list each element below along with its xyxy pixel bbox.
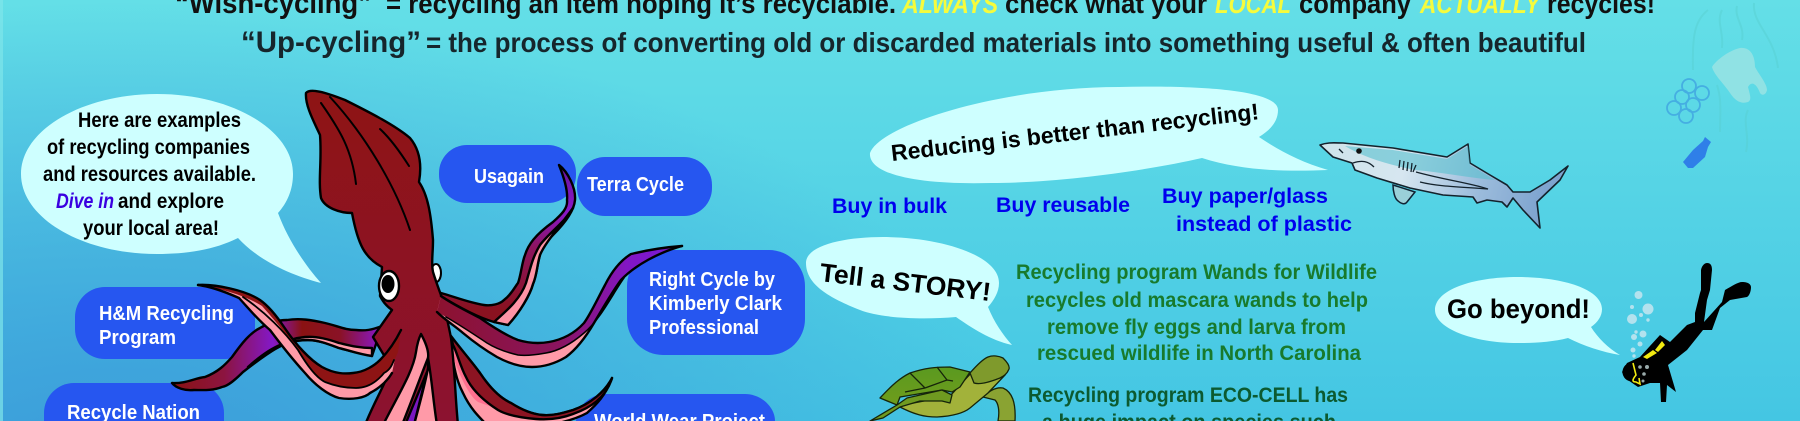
pill: Terra Cycle: Terra Cycle: [587, 173, 684, 196]
heading: up-cycling definition: “Up-cycling”: [241, 26, 421, 59]
text: Wands for Wildlife: [1016, 260, 1377, 365]
illustration: shark: [1320, 143, 1568, 228]
speech bubble: examples of recycling companies: and resources available.: [43, 162, 256, 186]
squid near eye: [379, 271, 399, 301]
pill: H&M Recycling Program: [75, 287, 255, 359]
text: reduce tips: Buy in bulk: [832, 194, 947, 218]
illustration: red squid: [172, 91, 682, 421]
speech bubble: examples of recycling companies: your local area!: [83, 216, 219, 240]
text: reduce tips: Buy paper/glass: [1162, 184, 1328, 208]
speech bubble: go beyond: Go beyond!: [1447, 294, 1590, 324]
icon: ocean trash and seaweed: [1667, 3, 1778, 168]
squid arm: lower left: [172, 319, 382, 390]
squid markings: [321, 97, 410, 230]
text: ECO-CELL: [1028, 383, 1348, 421]
speech bubble: reducing is better than recycling: [870, 87, 1328, 183]
squid mantle and body: [306, 91, 458, 421]
pill: Right Cycle by Kimberly Clark Professional: [627, 250, 805, 355]
pill: Right Cycle by Kimberly Clark Professional: Right Cycle by: [649, 268, 776, 291]
squid far eye: [431, 264, 441, 282]
speech bubble: examples of recycling companies: Dive in: [56, 189, 114, 213]
speech bubble: examples of recycling companies: [21, 94, 321, 283]
pill: H&M Recycling Program: H&M Recycling: [99, 302, 234, 325]
heading: up-cycling definition: = the process of converting old or discarded materials into something useful & often beautiful: [426, 27, 1586, 58]
pill: H&M Recycling Program: Program: [99, 326, 176, 349]
text: ECO-CELL: Recycling program ECO-CELL has: [1028, 383, 1348, 407]
speech bubble: examples of recycling companies: and explore: [118, 189, 224, 213]
speech bubble: reducing is better than recycling: Reducing is better than recycling!: [890, 98, 1260, 166]
text: Wands for Wildlife: Recycling program Wands for Wildlife: [1016, 260, 1377, 284]
speech bubble: examples of recycling companies: of recycling companies: [47, 135, 250, 159]
squid arm: upper left: [198, 285, 401, 399]
pill: Right Cycle by Kimberly Clark Professional: Kimberly Clark: [649, 292, 783, 315]
text: reduce tips: instead of plastic: [1176, 212, 1352, 236]
squid arm: right big: [437, 246, 682, 367]
pill: Recycle Nation: [44, 383, 224, 421]
pill: World Wear Project: [576, 394, 775, 421]
speech bubble: go beyond: [1435, 277, 1620, 355]
pill: Usagain: Usagain: [474, 165, 544, 188]
illustration: sea turtle: [870, 356, 1015, 421]
squid centre arm stripes: [383, 334, 437, 421]
squid arm: lower right: [451, 336, 612, 421]
speech bubble: tell a story: [806, 237, 1012, 345]
squid tentacle: upper right: [439, 165, 575, 325]
illustration: scuba diver: [1622, 263, 1751, 402]
pill: Usagain: [439, 145, 576, 203]
speech bubble: examples of recycling companies: Here are examples: [78, 108, 241, 132]
heading: wish-cycling definition: [175, 0, 1655, 20]
text: Wands for Wildlife: recycles old mascara wands to help: [1026, 288, 1368, 312]
text: reduce tips: [832, 184, 1352, 236]
text: reduce tips: Buy reusable: [996, 193, 1130, 217]
text: Wands for Wildlife: rescued wildlife in North Carolina: [1037, 341, 1362, 365]
pill: Terra Cycle: [577, 157, 712, 216]
speech bubble: tell a story: Tell a STORY!: [818, 257, 993, 307]
pill: Right Cycle by Kimberly Clark Professional: Professional: [649, 316, 759, 339]
text: Wands for Wildlife: remove fly eggs and larva from: [1047, 315, 1346, 339]
